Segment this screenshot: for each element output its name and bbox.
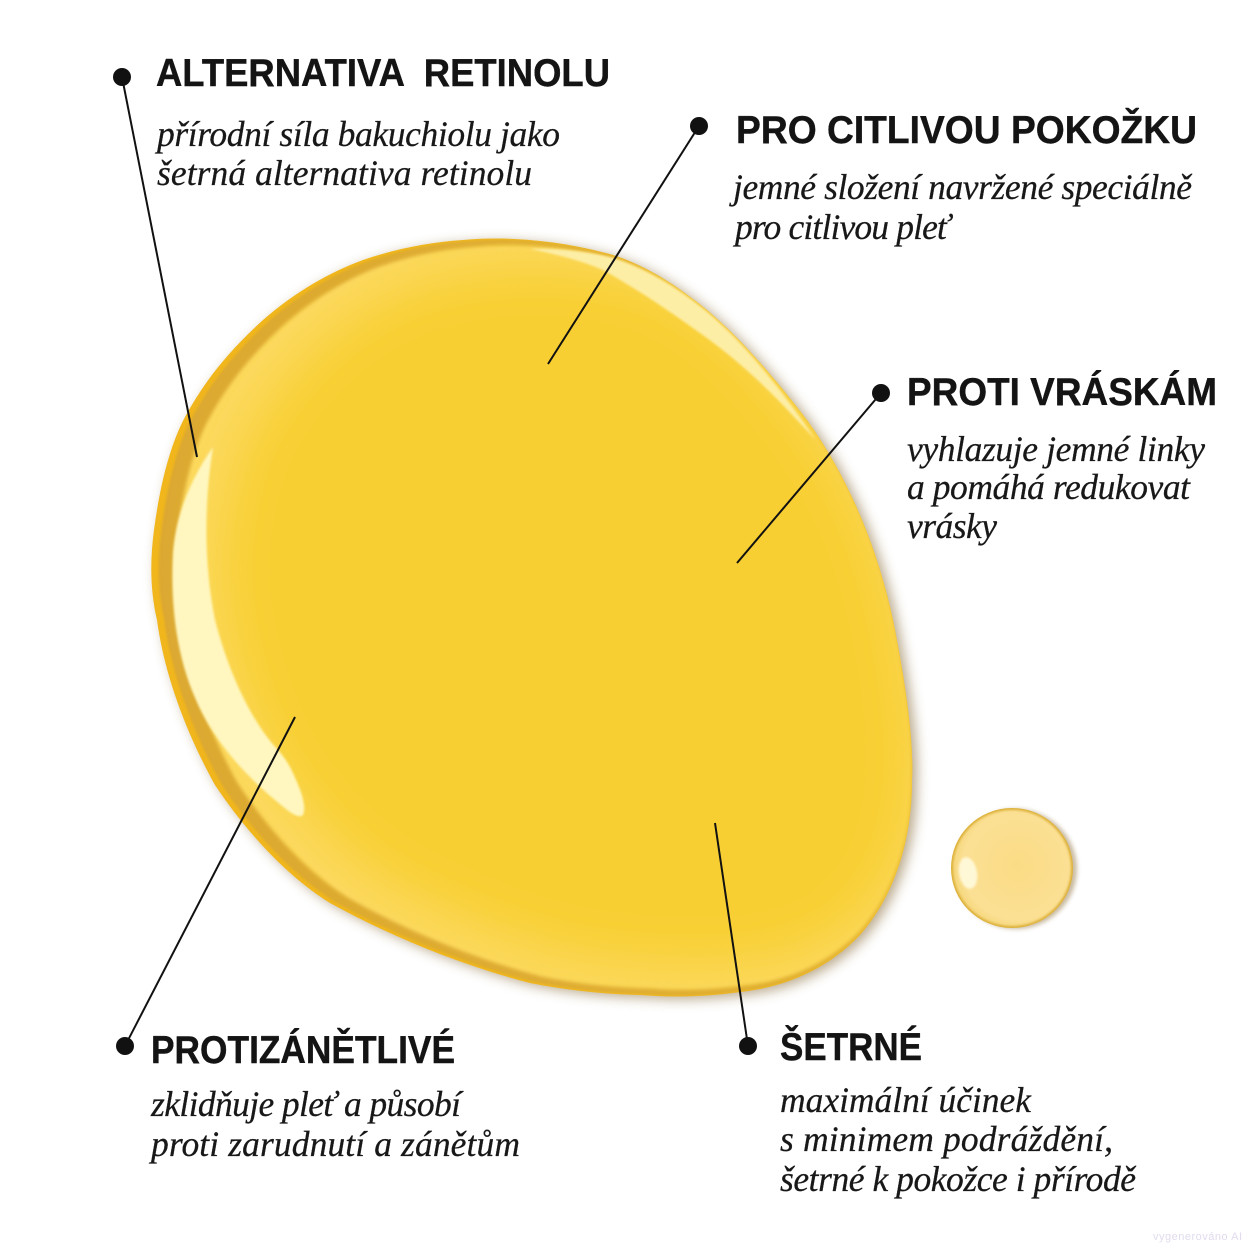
leader line: Šetrné [715,823,757,1055]
text: Šetrné: s minimem podráždění, [780,1119,1113,1159]
text: Proti vráskám: a pomáhá redukovat [907,467,1191,507]
highlight: top right [530,249,816,440]
leader line: Alternativa retinolu [113,68,197,457]
leader line: Protizánětlivé [116,717,295,1055]
text: Pro citlivou pokožku: jemné složení navržené speciálně [729,167,1192,207]
text: Alternativa retinolu: šetrná alternativa retinolu [157,153,532,193]
small drop highlight [956,856,980,890]
text: Šetrné: šetrné k pokožce i přírodě [780,1159,1136,1199]
heading: Pro citlivou pokožku: PRO CITLIVOU POKOŽKU [736,108,1197,152]
callout: Alternativa retinolu [113,52,610,457]
callout: Proti vráskám [737,370,1217,563]
highlight: left crescent [172,447,304,816]
text: Šetrné: maximální účinek [780,1080,1032,1120]
text: Protizánětlivé: proti zarudnutí a zánětům [148,1124,520,1164]
small oil drop [951,808,1077,929]
text: Protizánětlivé: zklidňuje pleť a působí [150,1084,464,1124]
watermark: vygenerováno AI [1153,1231,1242,1243]
heading: Protizánětlivé: PROTIZÁNĚTLIVÉ [151,1028,455,1072]
leader line: Pro citlivou pokožku [548,117,708,364]
heading: Alternativa retinolu: ALTERNATIVA RETINOLU [156,52,610,95]
callout: Šetrné [715,823,1136,1199]
text: Proti vráskám: vrásky [907,506,997,546]
heading: Šetrné: ŠETRNÉ [780,1024,922,1069]
text: Proti vráskám: vyhlazuje jemné linky [907,429,1205,469]
callout: Pro citlivou pokožku [548,108,1197,364]
leader line: Proti vráskám [737,384,890,563]
callout: Protizánětlivé [116,717,520,1164]
main oil drop [151,239,917,999]
text: Pro citlivou pokožku: pro citlivou pleť [732,207,953,247]
heading: Proti vráskám: PROTI VRÁSKÁM [907,370,1217,414]
text: Alternativa retinolu: přírodní síla bakuchiolu jako [154,114,560,154]
